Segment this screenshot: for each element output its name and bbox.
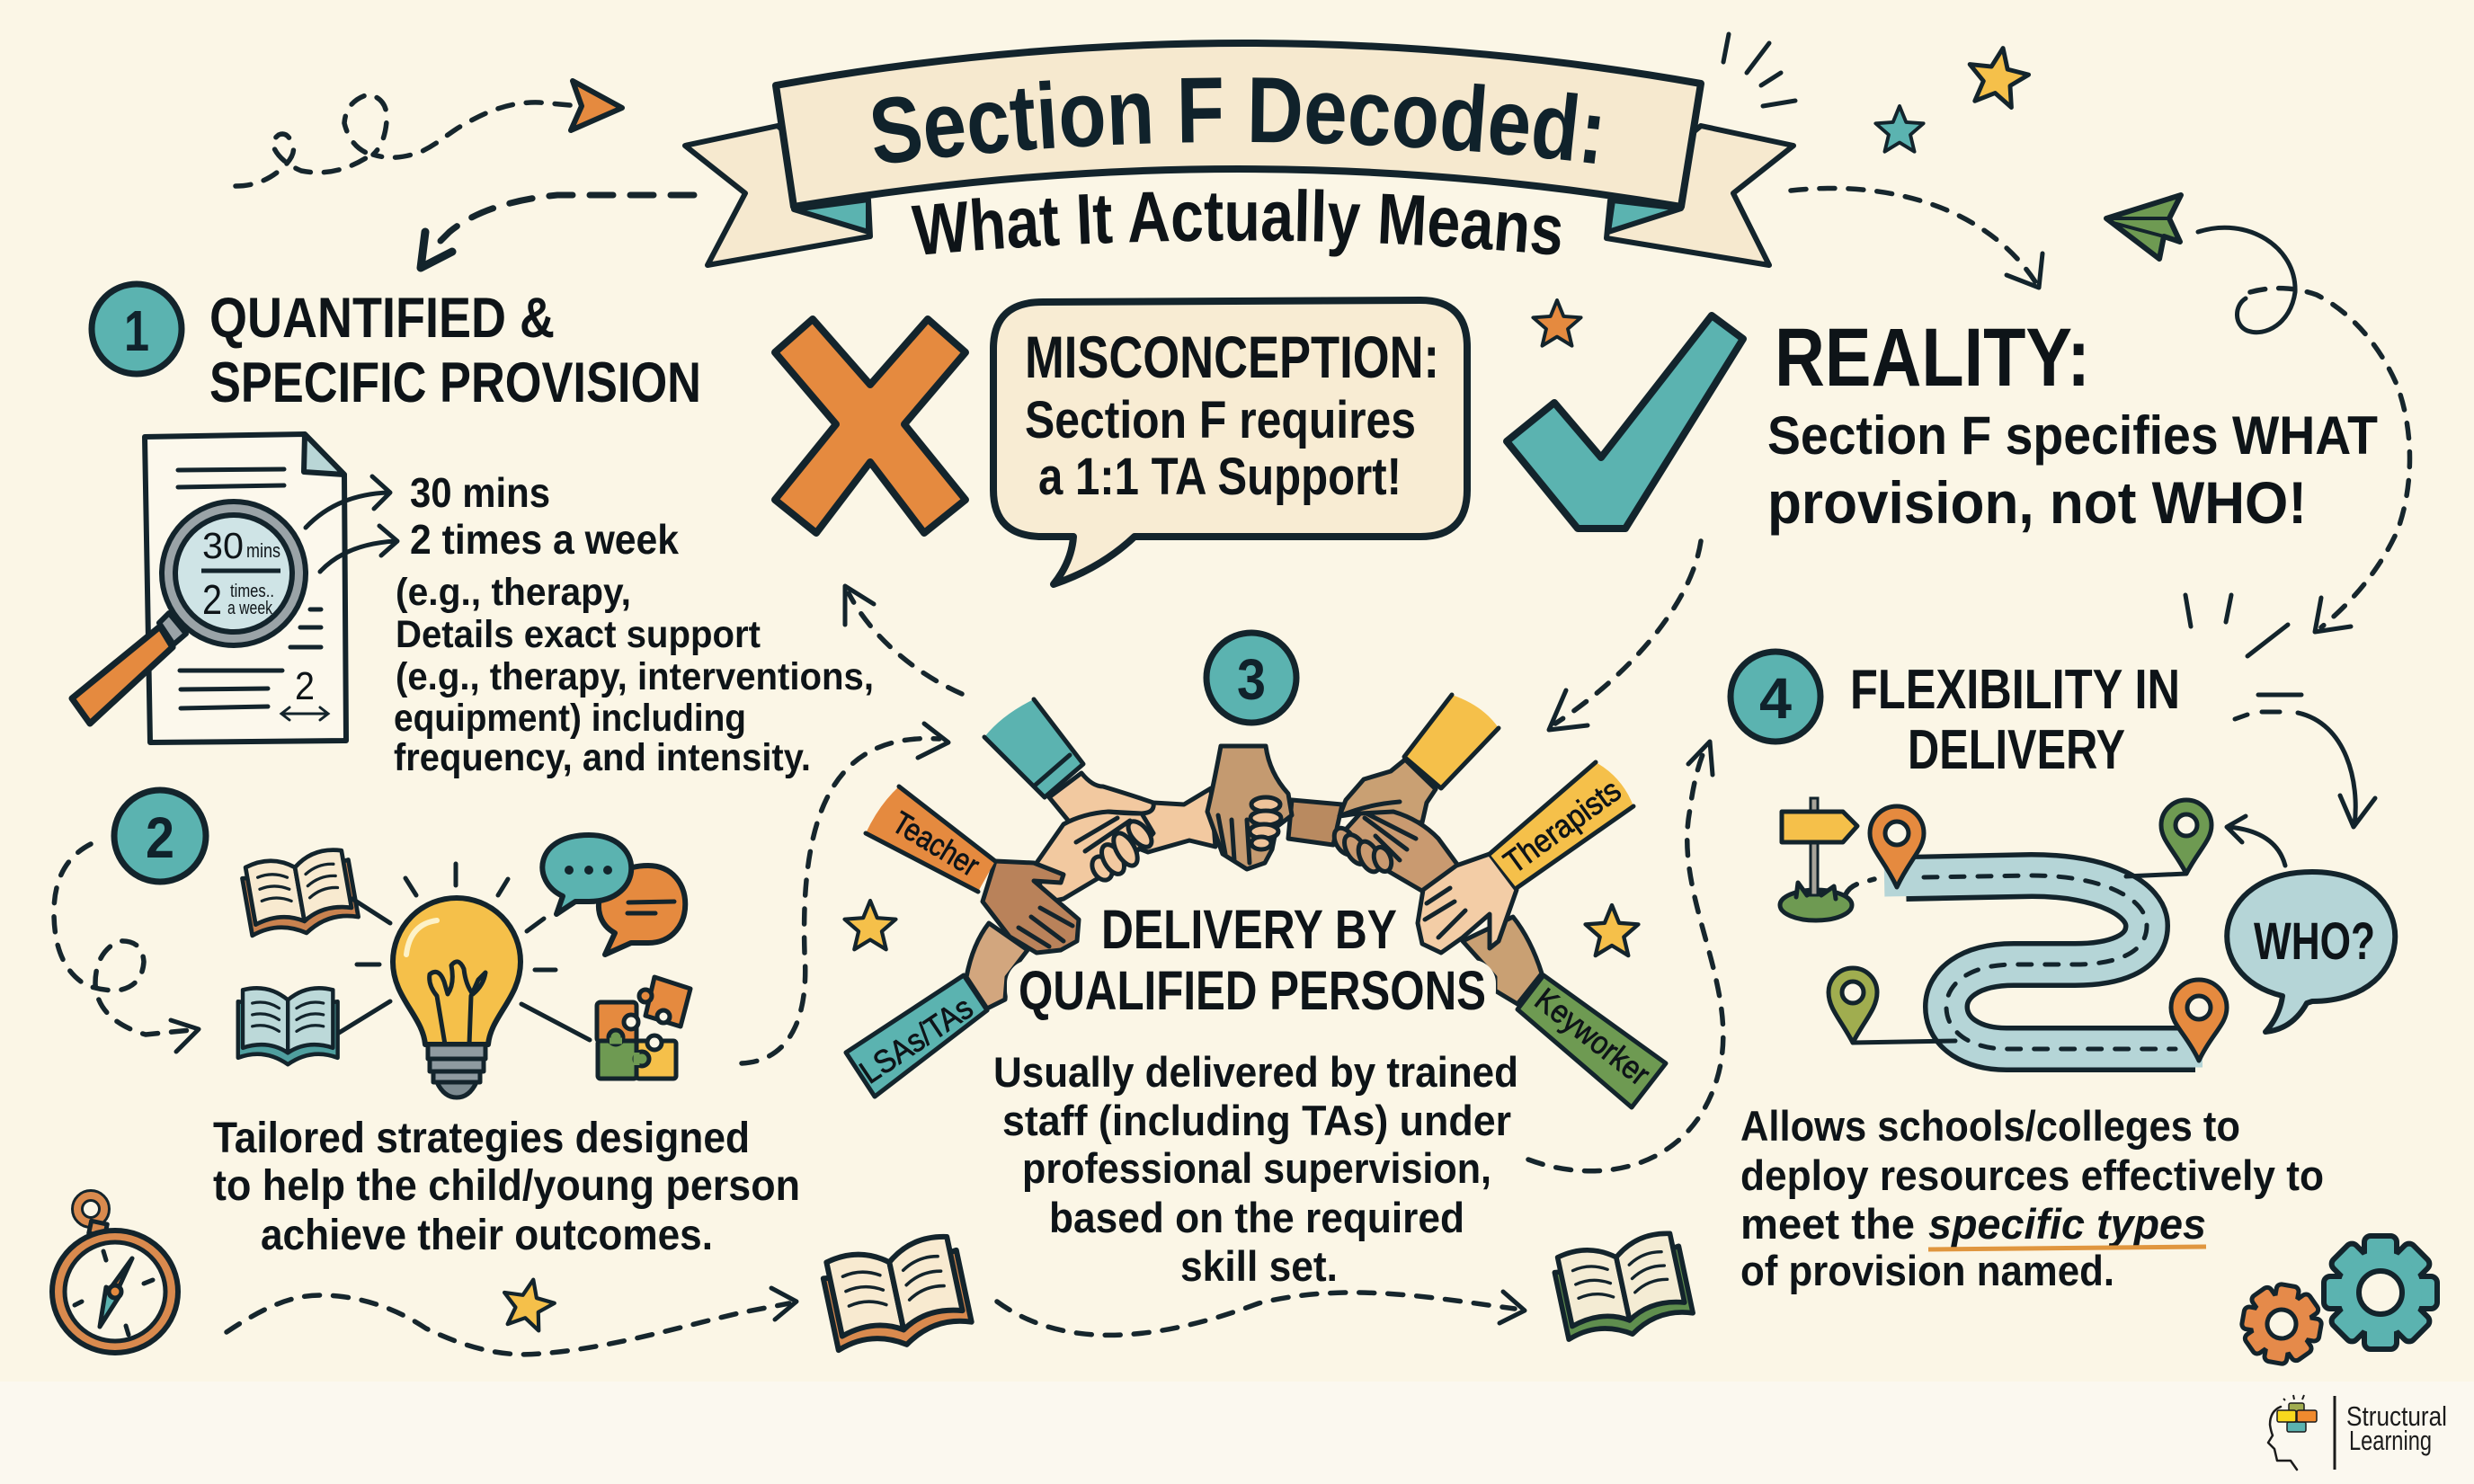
- arrow: banner to reality: [1791, 188, 2042, 288]
- icon: document with magnifier: [72, 434, 346, 742]
- sleeve: Therapists: Therapists: [1497, 771, 1627, 881]
- arrow: section 3 to section 4: [1528, 742, 1723, 1171]
- arrow: wavy dashed bottom left: [227, 1288, 796, 1355]
- hand: yellow sleeve: [1339, 760, 1436, 822]
- hand: centre: [1207, 746, 1292, 869]
- section 2: [54, 790, 800, 1259]
- badge 1: [92, 284, 182, 374]
- icon: map pin orange bottom: [2171, 980, 2227, 1061]
- icon: book orange bottom: [820, 1233, 974, 1359]
- title banner: [682, 40, 1796, 268]
- misconception text: a 1:1 TA Support!: [1038, 448, 1402, 506]
- section 3: [845, 633, 1666, 1290]
- sleeve: Teacher: Teacher: [886, 804, 985, 884]
- badge 3: [1206, 633, 1296, 723]
- heading 1: [209, 287, 701, 414]
- text: section 3 body: skill set.: [1180, 1242, 1338, 1290]
- star: right of hands: [1586, 905, 1638, 955]
- text: section 3 body: professional supervision,: [1022, 1144, 1491, 1192]
- text: section 1 body: [394, 571, 874, 779]
- text: section 2 body: achieve their outcomes.: [261, 1212, 713, 1259]
- badge 4: 4: [1759, 666, 1792, 731]
- icon: map pin green: [2161, 800, 2211, 874]
- reality text: [1767, 312, 2378, 536]
- text: quantities: [410, 469, 679, 563]
- icon: map pin olive: [1829, 968, 1877, 1043]
- text: section 3 body: staff (including TAs) under: [1002, 1097, 1511, 1144]
- arrow: check to hands: [1549, 541, 1701, 730]
- icon: gears: [2239, 1239, 2434, 1366]
- star: teal top right: [1875, 106, 1924, 152]
- badge 3: 3: [1237, 647, 1266, 712]
- arrows to quantities: [306, 476, 397, 572]
- text: section 4 body: specific types: [1928, 1200, 2206, 1248]
- text: section 1 body: (e.g., therapy,: [396, 571, 631, 614]
- icon: document with magnifier: times..: [230, 582, 274, 601]
- heading 3: DELIVERY BY: [1101, 899, 1397, 960]
- icon: speech bubbles: [542, 835, 685, 955]
- icon: book green bottom: [1552, 1230, 1695, 1347]
- reality text: provision, not WHO!: [1767, 469, 2307, 536]
- badge 1: 1: [124, 298, 149, 363]
- text: section 2 body: Tailored strategies designed: [213, 1115, 750, 1162]
- text: section 3 body: based on the required: [1049, 1194, 1464, 1241]
- arrow: banner to section 1: [421, 195, 694, 268]
- star: left of hands: [845, 901, 895, 949]
- sleeve: yellow upper right: [1404, 695, 1499, 788]
- text: section 4 body: [1740, 1102, 2324, 1294]
- misconception text: MISCONCEPTION:: [1025, 324, 1439, 390]
- sleeve: Teacher: [866, 786, 995, 892]
- star: bottom: [498, 1275, 558, 1333]
- icon: document with magnifier: mins: [246, 539, 280, 562]
- arrow: dashed bottom middle: [997, 1292, 1525, 1335]
- icon: signpost: [1780, 798, 1874, 920]
- sleeve: Keyworker: Keyworker: [1528, 981, 1657, 1092]
- heading 4: FLEXIBILITY IN: [1850, 659, 2180, 721]
- arm: Keyworker: [1463, 917, 1542, 1004]
- icon: orange cross: [775, 319, 966, 533]
- misconception speech bubble: [993, 300, 1467, 584]
- text: section 2 body: [213, 1115, 800, 1259]
- looping dashed arrow: [54, 844, 199, 1052]
- hand: light upper left: [1049, 773, 1215, 852]
- logo: Structural Learning: Structural: [2346, 1400, 2447, 1432]
- icon: document with magnifier: 2: [202, 576, 222, 623]
- logo: Structural Learning: [2268, 1395, 2447, 1470]
- icon: document with magnifier: a week: [227, 599, 273, 618]
- arrow: who to pin: [2227, 816, 2285, 866]
- badge 4: [1731, 652, 1820, 742]
- WHO speech bubble: WHO?: [2254, 912, 2375, 971]
- heading 1: QUANTIFIED &: [209, 287, 555, 350]
- text: section 4 body: Allows schools/colleges to: [1740, 1102, 2240, 1150]
- title text: Section F Decoded:: [873, 77, 1600, 164]
- heading 3: [1007, 899, 1496, 1021]
- text: section 3 body: [993, 1048, 1518, 1290]
- text: section 3 body: Usually delivered by trained: [993, 1048, 1518, 1096]
- hand: Teacher: [983, 861, 1079, 953]
- icon: light bulb with connectors: [339, 864, 590, 1097]
- WHO speech bubble: [2227, 872, 2395, 1032]
- reality text: REALITY:: [1775, 312, 2090, 404]
- text: section 4 body: deploy resources effectively to: [1740, 1151, 2324, 1199]
- decorative squiggle arrow top left: [236, 81, 622, 186]
- forearm: brown centre right: [1288, 800, 1342, 845]
- text: section 1 body: frequency, and intensity.: [394, 736, 811, 779]
- icon: teal check mark: [1507, 315, 1743, 529]
- icon: open book teal: [238, 988, 338, 1064]
- section 4: [1731, 595, 2395, 1294]
- icon: document with magnifier: 2: [295, 664, 315, 708]
- arrow: hands to misconception: [845, 586, 962, 694]
- text: section 1 body: Details exact support: [396, 613, 761, 656]
- heading 4: DELIVERY: [1908, 719, 2125, 781]
- star: orange: [1533, 300, 1581, 346]
- section 1: [72, 284, 874, 779]
- sleeve: teal upper left: [984, 699, 1083, 797]
- illustration: winding road: [1853, 874, 2203, 1049]
- subtitle: What It Actually Means: [911, 189, 1561, 257]
- reality text: Section F specifies WHAT: [1767, 405, 2378, 466]
- text: quantities: 30 mins: [410, 469, 550, 516]
- icon: map pin orange top: [1870, 806, 1924, 887]
- text: section 4 body: meet the: [1740, 1200, 1915, 1248]
- sparkle lines and arrow to road: [2185, 595, 2375, 827]
- heading 1: SPECIFIC PROVISION: [209, 351, 701, 414]
- badge 2: [114, 790, 206, 882]
- star: yellow top right: [1963, 43, 2033, 110]
- text: section 4 body: of provision named.: [1740, 1247, 2114, 1294]
- icon: compass: [52, 1195, 178, 1353]
- logo: Structural Learning: Learning: [2349, 1425, 2432, 1456]
- sleeve: LSAs/TAs: LSAs/TAs: [853, 989, 979, 1090]
- badge 2: 2: [146, 805, 174, 870]
- text: section 1 body: equipment) including: [394, 697, 746, 740]
- sparkle lines near banner: [1723, 34, 1795, 106]
- text: quantities: 2 times a week: [410, 516, 679, 563]
- heading 3: QUALIFIED PERSONS: [1019, 960, 1486, 1021]
- text: section 1 body: (e.g., therapy, interventions,: [396, 655, 874, 698]
- icon: document with magnifier: 30: [202, 525, 244, 566]
- icon: paper plane with looping arrow: [2106, 195, 2409, 632]
- arm: right clasping: [1330, 802, 1458, 893]
- arm: LSA: [966, 923, 1028, 1009]
- text: section 2 body: to help the child/young person: [213, 1162, 800, 1210]
- hand: Therapists: [1418, 854, 1517, 953]
- hand: light clasping: [1037, 803, 1156, 903]
- misconception text: [1025, 324, 1439, 506]
- icon: open book cream: [240, 847, 360, 942]
- misconception text: Section F requires: [1025, 391, 1416, 449]
- heading 4: [1850, 659, 2180, 781]
- icon: puzzle pieces: [597, 977, 690, 1079]
- arrow: section 2 to hands: [742, 724, 948, 1063]
- illustration: joined hands: [846, 695, 1666, 1107]
